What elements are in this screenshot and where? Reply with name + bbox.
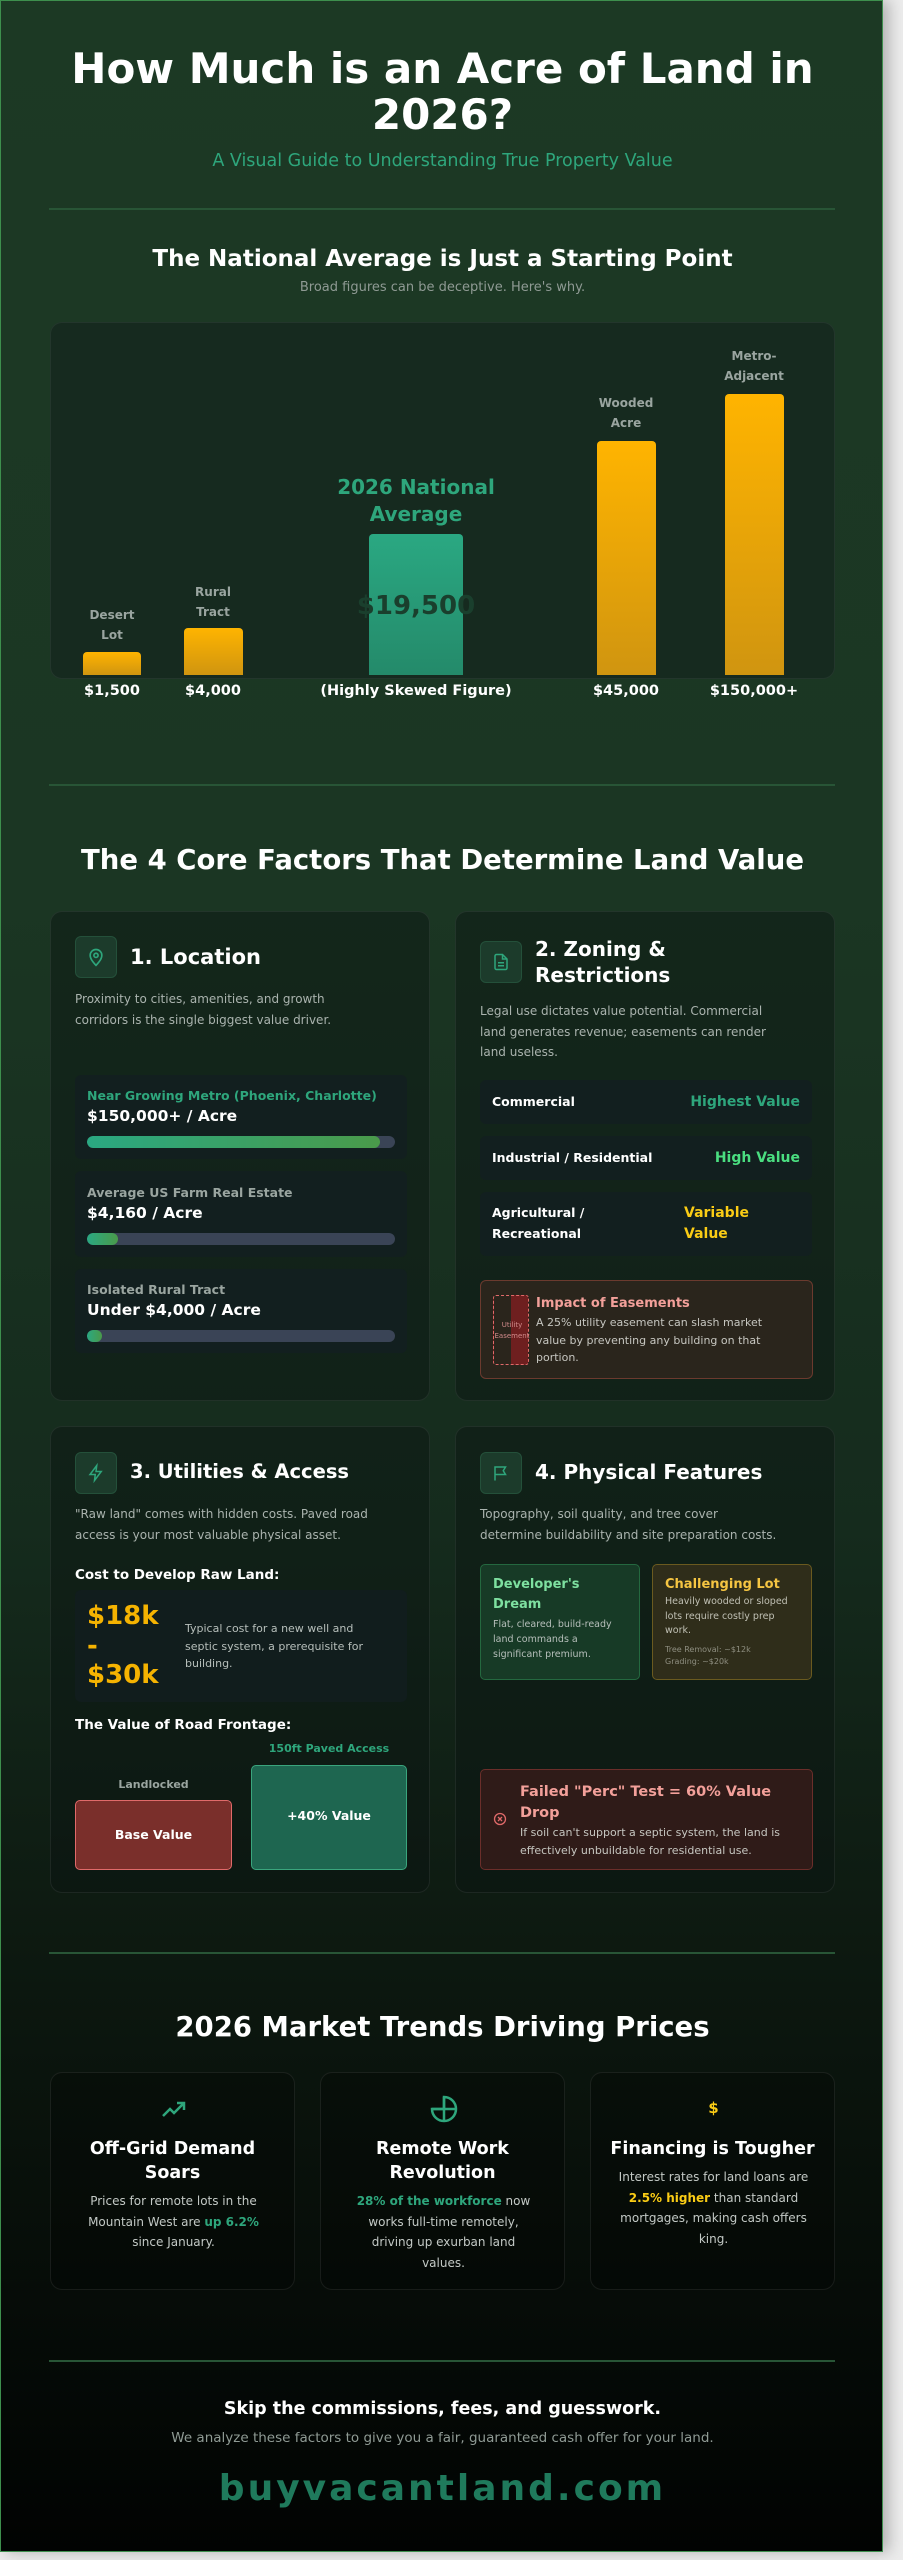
icon: easement diagram: Utility [502, 1321, 522, 1329]
bar chart: Acre [611, 416, 641, 430]
cost box: - [87, 1630, 98, 1660]
icon: lightning [75, 1452, 117, 1494]
stat: isolated rural: Under $4,000 / Acre [87, 1301, 261, 1319]
subheading: road frontage: The Value of Road Frontage: [75, 1717, 291, 1733]
box: challenging lot: Heavily wooded or sloped lots require costly prep work. [665, 1596, 788, 1636]
box: developer's dream [480, 1564, 640, 1680]
stat: near metro: Near Growing Metro (Phoenix, Charlotte) [87, 1088, 377, 1103]
icon: pie chart [430, 2096, 458, 2122]
bar chart [83, 349, 798, 699]
title: 2026? [372, 90, 513, 139]
bar chart: $1,500 [84, 683, 140, 699]
bar chart: Rural [195, 585, 231, 599]
stat: near metro: $150,000+ / Acre [87, 1107, 237, 1125]
bar: wooded acre [593, 396, 659, 699]
title: 1. Location [130, 945, 261, 969]
row: agricultural: Recreational [492, 1226, 581, 1240]
bar chart: Lot [101, 628, 123, 642]
bar: rural tract [184, 585, 243, 699]
title [71, 44, 814, 139]
panel: financing [590, 2072, 835, 2290]
row: agricultural: Variable [684, 1205, 749, 1221]
bar: desert lot [83, 608, 141, 699]
description: Legal use dictates value potential. Commercial land generates revenue; easements can render land useless. [480, 1004, 766, 1059]
panel: remote work [320, 2072, 565, 2290]
callout: failed perc test: If soil can't support a septic system, the land is effectively unbuildable for residential use. [520, 1826, 780, 1857]
callout: easements: Impact of Easements [536, 1296, 690, 1311]
row: commercial: Highest Value [690, 1094, 800, 1110]
bar chart: (Highly Skewed Figure) [320, 683, 512, 699]
bar chart: Desert [89, 608, 135, 622]
label: landlocked: Landlocked [118, 1778, 189, 1791]
icon: map pin [75, 936, 117, 978]
bar chart panel [50, 322, 835, 679]
box: challenging lot: Grading: ~$20k [665, 1657, 729, 1666]
subheading: Broad figures can be deceptive. Here's why. [300, 280, 585, 295]
title: 2. Zoning & [535, 937, 666, 961]
bar chart: $150,000+ [710, 683, 798, 699]
row: industrial: Industrial / Residential [492, 1150, 652, 1165]
footer: subtext: We analyze these factors to give you a fair, guaranteed cash offer for your land. [171, 2430, 714, 2446]
panel: remote work: Remote Work [376, 2139, 509, 2159]
bar chart: Average [370, 502, 462, 526]
bar chart: Metro- [732, 349, 776, 363]
panel: location [50, 911, 430, 1401]
callout: easements [480, 1280, 813, 1379]
stat: isolated rural [75, 1269, 407, 1353]
bar: metro-adjacent [710, 349, 798, 699]
title [535, 937, 670, 987]
heading: national average: The National Average is Just a Starting Point [152, 246, 733, 272]
box: challenging lot [652, 1564, 812, 1680]
bar: national average [320, 475, 512, 699]
icon: trend up [162, 2102, 186, 2117]
stat: farm real estate: Average US Farm Real Estate [87, 1185, 293, 1200]
title: 4. Physical Features [535, 1460, 762, 1484]
panel: financing: Interest rates for land loans are 2.5% higher than standard mortgages, making cash offers king. [619, 2170, 808, 2246]
callout: failed perc test: Failed "Perc" Test = 60% Value Drop [520, 1784, 771, 1821]
footer: brand url: buyvacantland.com [219, 2468, 666, 2509]
bar chart: $45,000 [593, 683, 659, 699]
bar chart: Tract [196, 605, 230, 619]
heading: 4 core factors: The 4 Core Factors That Determine Land Value [81, 844, 804, 876]
description: Topography, soil quality, and tree cover determine buildability and site preparation costs. [480, 1507, 776, 1542]
box: +40% value [251, 1765, 407, 1870]
panel: off-grid demand: Soars [145, 2163, 200, 2183]
subheading: cost: Cost to Develop Raw Land: [75, 1567, 279, 1583]
cost box: Typical cost for a new well and septic system, a prerequisite for building. [185, 1622, 363, 1670]
subtitle: A Visual Guide to Understanding True Property Value [212, 151, 673, 171]
stat: farm real estate [75, 1171, 407, 1257]
icon: easement diagram: Easement [494, 1332, 529, 1340]
cost box [75, 1590, 407, 1702]
bar chart: 2026 National [337, 475, 495, 499]
panel: remote work: 28% of the workforce now works full-time remotely, driving up exurban land values. [357, 2194, 530, 2270]
footer: call to action: Skip the commissions, fees, and guesswork. [224, 2399, 661, 2419]
icon: document [480, 941, 522, 983]
panel: off-grid demand: Off-Grid Demand [90, 2139, 255, 2159]
stat: near metro [75, 1075, 407, 1159]
panel: utilities [50, 1426, 430, 1893]
icon: flag [480, 1452, 522, 1494]
title: How Much is an Acre of Land in [71, 44, 814, 93]
row: agricultural: Value [684, 1226, 728, 1242]
box: developer's dream: Developer's [493, 1577, 580, 1592]
box: base value [75, 1800, 232, 1870]
icon: easement diagram [493, 1295, 529, 1365]
box: challenging lot: Tree Removal: ~$12k [665, 1645, 751, 1654]
stat: isolated rural: Isolated Rural Tract [87, 1282, 225, 1297]
panel: remote work: Revolution [389, 2163, 496, 2183]
title: Restrictions [535, 963, 670, 987]
panel: off-grid demand [50, 2072, 295, 2290]
row: industrial [480, 1136, 812, 1180]
description: "Raw land" comes with hidden costs. Paved road access is your most valuable physical asset. [75, 1507, 368, 1542]
panel: off-grid demand: Prices for remote lots in the Mountain West are up 6.2% since January. [88, 2194, 259, 2249]
box: developer's dream: Flat, cleared, build-ready land commands a significant premium. [493, 1619, 612, 1660]
box: developer's dream: Dream [493, 1597, 541, 1612]
bar chart: $4,000 [185, 683, 241, 699]
row: industrial: High Value [715, 1150, 800, 1166]
bar chart: Wooded [599, 396, 653, 410]
bar chart: Adjacent [724, 369, 784, 383]
cost box: $18k [87, 1601, 159, 1631]
description: Proximity to cities, amenities, and growth corridors is the single biggest value driver. [75, 992, 331, 1027]
row: commercial [480, 1080, 812, 1124]
icon: dollar: $ [708, 2099, 719, 2117]
row: agricultural: Agricultural / [492, 1205, 584, 1220]
bar chart: $19,500 [357, 591, 475, 621]
icon: x circle [494, 1812, 506, 1826]
box: base value: Base Value [115, 1827, 192, 1842]
heading: market trends: 2026 Market Trends Driving Prices [175, 2011, 710, 2043]
panel: zoning [455, 911, 835, 1401]
callout: failed perc test [480, 1769, 813, 1870]
panel: physical features [455, 1426, 835, 1893]
cost box: $30k [87, 1660, 159, 1690]
label: paved access: 150ft Paved Access [269, 1742, 389, 1755]
panel: financing: Financing is Tougher [610, 2139, 815, 2159]
title: 3. Utilities & Access [130, 1460, 349, 1483]
box: +40% value: +40% Value [287, 1808, 371, 1823]
box: challenging lot: Challenging Lot [665, 1577, 780, 1592]
stat: farm real estate: $4,160 / Acre [87, 1204, 203, 1222]
row: commercial: Commercial [492, 1094, 575, 1109]
row: agricultural [480, 1192, 812, 1256]
callout: easements: A 25% utility easement can slash market value by preventing any building on that portion. [536, 1316, 762, 1364]
